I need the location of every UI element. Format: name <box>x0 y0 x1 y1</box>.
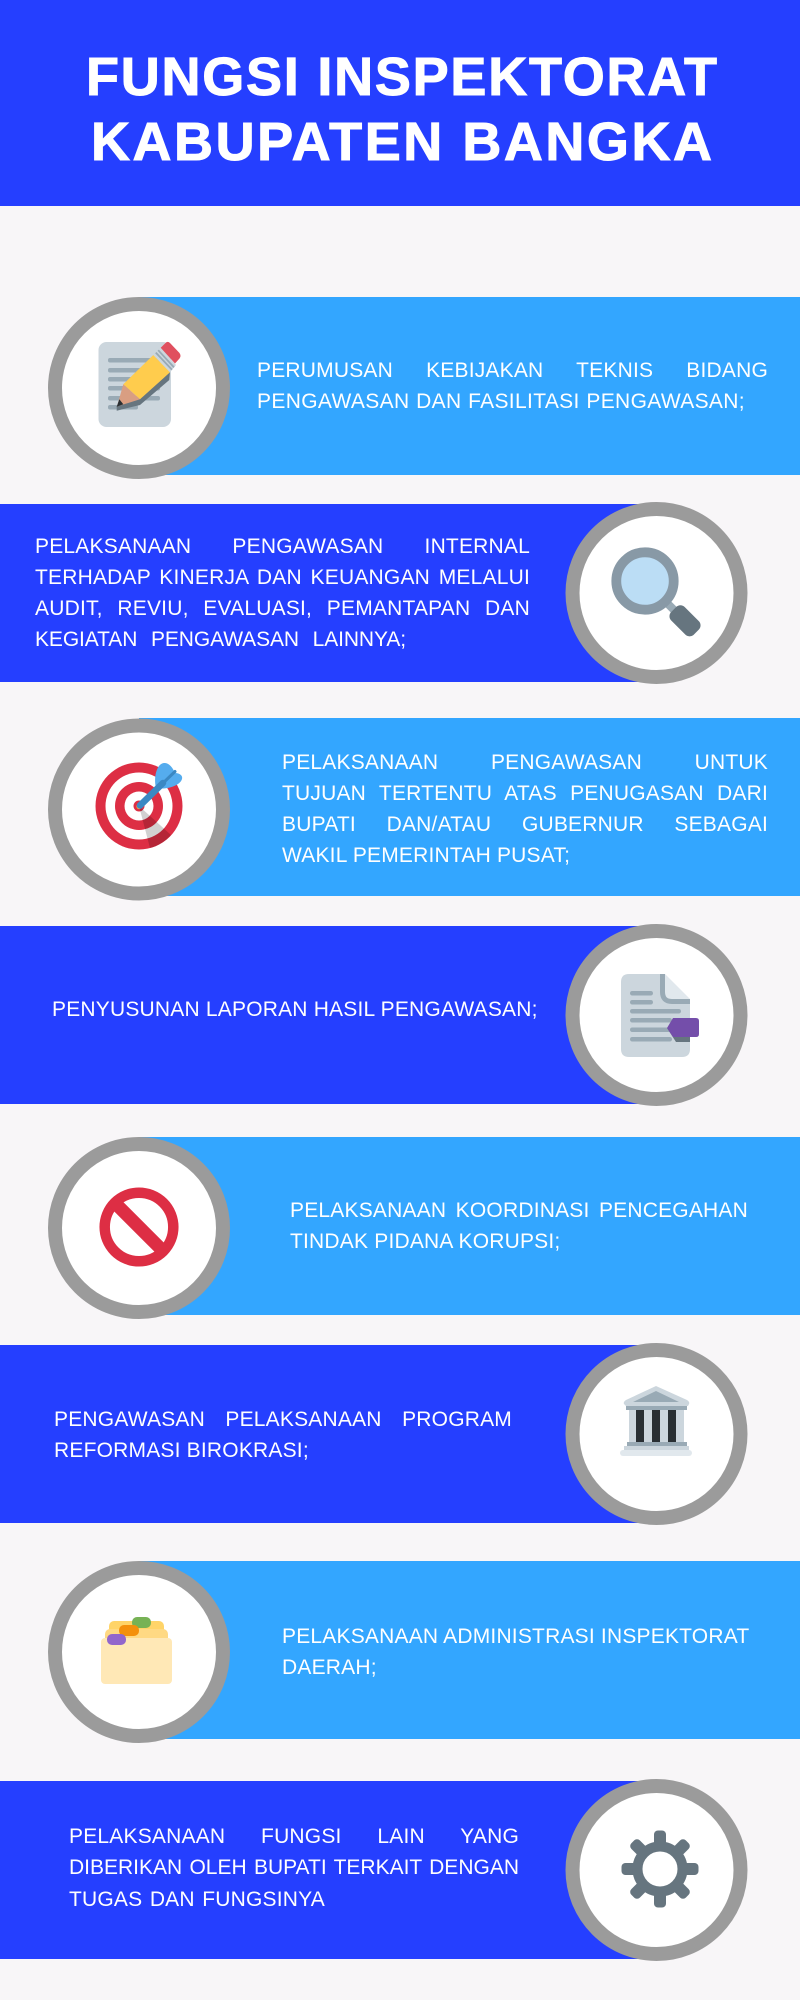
text: function 7 <box>282 1625 749 1679</box>
panel: function 2 <box>0 502 748 684</box>
text: function 6: PENGAWASAN PELAKSANAAN PROGRAM <box>54 1408 512 1431</box>
title: KABUPATEN BANGKA <box>91 112 712 172</box>
band 6 <box>0 1345 657 1523</box>
band 7 <box>139 1561 800 1739</box>
text: function 3: TUJUAN TERTENTU ATAS PENUGASAN DARI <box>282 782 768 805</box>
text: function 2: KEGIATAN PENGAWASAN LAINNYA; <box>35 628 406 651</box>
text: function 5: TINDAK PIDANA KORUPSI; <box>290 1230 560 1253</box>
text: function 1 <box>257 359 768 413</box>
band 5 <box>139 1137 800 1315</box>
band 4 <box>0 926 657 1104</box>
text: function 1: PENGAWASAN DAN FASILITASI PENGAWASAN; <box>257 390 745 413</box>
panel: function 6 <box>0 1343 748 1525</box>
text: function 2: TERHADAP KINERJA DAN KEUANGAN MELALUI <box>35 566 530 589</box>
text: function 6 <box>54 1408 512 1462</box>
text: function 3: BUPATI DAN/ATAU GUBERNUR SEBAGAI <box>282 813 768 836</box>
text: function 3 <box>282 751 768 867</box>
panel: function 7 <box>48 1561 800 1743</box>
text: function 1: PERUMUSAN KEBIJAKAN TEKNIS BIDANG <box>257 359 768 382</box>
text: function 3: WAKIL PEMERINTAH PUSAT; <box>282 844 570 867</box>
text: function 8: TUGAS DAN FUNGSINYA <box>69 1888 325 1911</box>
text: function 5 <box>290 1199 748 1253</box>
title: FUNGSI INSPEKTORAT <box>86 47 717 107</box>
text: function 4: PENYUSUNAN LAPORAN HASIL PENGAWASAN; <box>52 998 538 1021</box>
text: function 5: PELAKSANAAN KOORDINASI PENCEGAHAN <box>290 1199 748 1222</box>
panel: function 1 <box>48 297 800 479</box>
icon: target and dart in ring <box>48 718 230 900</box>
icon: gear in ring <box>566 1779 748 1961</box>
band 1 <box>139 297 800 475</box>
text: function 8: DIBERIKAN OLEH BUPATI TERKAIT DENGAN <box>69 1856 519 1879</box>
text: function 6: REFORMASI BIROKRASI; <box>54 1439 309 1462</box>
title <box>86 47 717 172</box>
icon: document with tag in ring <box>566 924 748 1106</box>
header banner <box>0 0 800 206</box>
text: function 2: AUDIT, REVIU, EVALUASI, PEMANTAPAN DAN <box>35 597 530 620</box>
text: function 3: PELAKSANAAN PENGAWASAN UNTUK <box>282 751 768 774</box>
panel: function 8 <box>0 1779 748 1961</box>
band 3 <box>139 718 800 896</box>
text: function 8 <box>69 1825 519 1911</box>
text: function 2 <box>35 535 530 651</box>
icon: prohibition sign in ring <box>48 1137 230 1319</box>
panel: function 3 <box>48 718 800 900</box>
panel: function 4 <box>0 924 748 1106</box>
icon: government building in ring <box>566 1343 748 1525</box>
icon: magnifier in ring <box>566 502 748 684</box>
text: function 7: DAERAH; <box>282 1656 377 1679</box>
text: function 8: PELAKSANAAN FUNGSI LAIN YANG <box>69 1825 519 1848</box>
panel: function 5 <box>48 1137 800 1319</box>
text: function 7: PELAKSANAAN ADMINISTRASI INSPEKTORAT <box>282 1625 749 1648</box>
band 8 <box>0 1781 657 1959</box>
icon: card file folder in ring <box>48 1561 230 1743</box>
band 2 <box>0 504 657 682</box>
icon: pencil and paper in ring <box>48 297 230 479</box>
text: function 2: PELAKSANAAN PENGAWASAN INTERNAL <box>35 535 530 558</box>
